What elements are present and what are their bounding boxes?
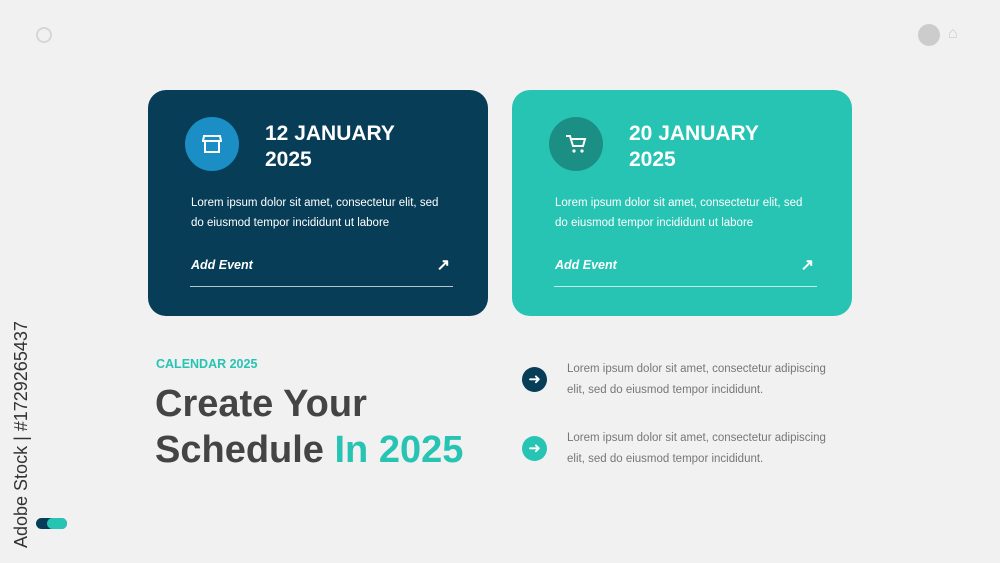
description: Lorem ipsum dolor sit amet, consectetur elit, sed do eiusmod tempor incididunt ut labore bbox=[191, 197, 438, 229]
text: Lorem ipsum dolor sit amet, consectetur adipiscing elit, sed do eiusmod tempor incididunt. bbox=[567, 363, 826, 396]
description: Lorem ipsum dolor sit amet, consectetur elit, sed do eiusmod tempor incididunt ut labore bbox=[555, 197, 802, 229]
date heading: 20 JANUARY bbox=[629, 122, 759, 145]
icon: globe bbox=[36, 27, 52, 43]
add event link: Add Event bbox=[191, 258, 253, 272]
icon: arrow circle dark bbox=[522, 367, 547, 392]
date heading bbox=[629, 122, 759, 171]
title: Schedule In 2025 bbox=[155, 429, 463, 471]
icon: arrow circle dark: ➜ bbox=[528, 371, 541, 388]
icon: arrow: ↗ bbox=[437, 257, 450, 274]
watermark text vertical: Adobe Stock | #1729265437 bbox=[11, 321, 31, 548]
bullet 1 bbox=[522, 363, 826, 396]
icon: cart bbox=[549, 117, 603, 171]
toggle pill bbox=[36, 518, 67, 529]
date heading: 2025 bbox=[629, 148, 676, 171]
add event link: Add Event bbox=[555, 258, 617, 272]
card: 20 January bbox=[512, 90, 852, 316]
date heading bbox=[265, 122, 395, 171]
date heading: 12 JANUARY bbox=[265, 122, 395, 145]
icon: arrow: ↗ bbox=[801, 257, 814, 274]
subtitle: CALENDAR 2025 bbox=[156, 357, 257, 371]
title: Create Your bbox=[155, 383, 367, 425]
icon: bell bbox=[918, 24, 940, 46]
card: 12 January bbox=[148, 90, 488, 316]
bullet 2 bbox=[522, 432, 826, 465]
date heading: 2025 bbox=[265, 148, 312, 171]
text: Lorem ipsum dolor sit amet, consectetur adipiscing elit, sed do eiusmod tempor incididunt. bbox=[567, 432, 826, 465]
title bbox=[155, 383, 463, 471]
icon: arrow circle teal: ➜ bbox=[528, 440, 541, 457]
icon: home: ⌂ bbox=[948, 25, 958, 42]
icon: arrow circle teal bbox=[522, 436, 547, 461]
icon: store bbox=[185, 117, 239, 171]
